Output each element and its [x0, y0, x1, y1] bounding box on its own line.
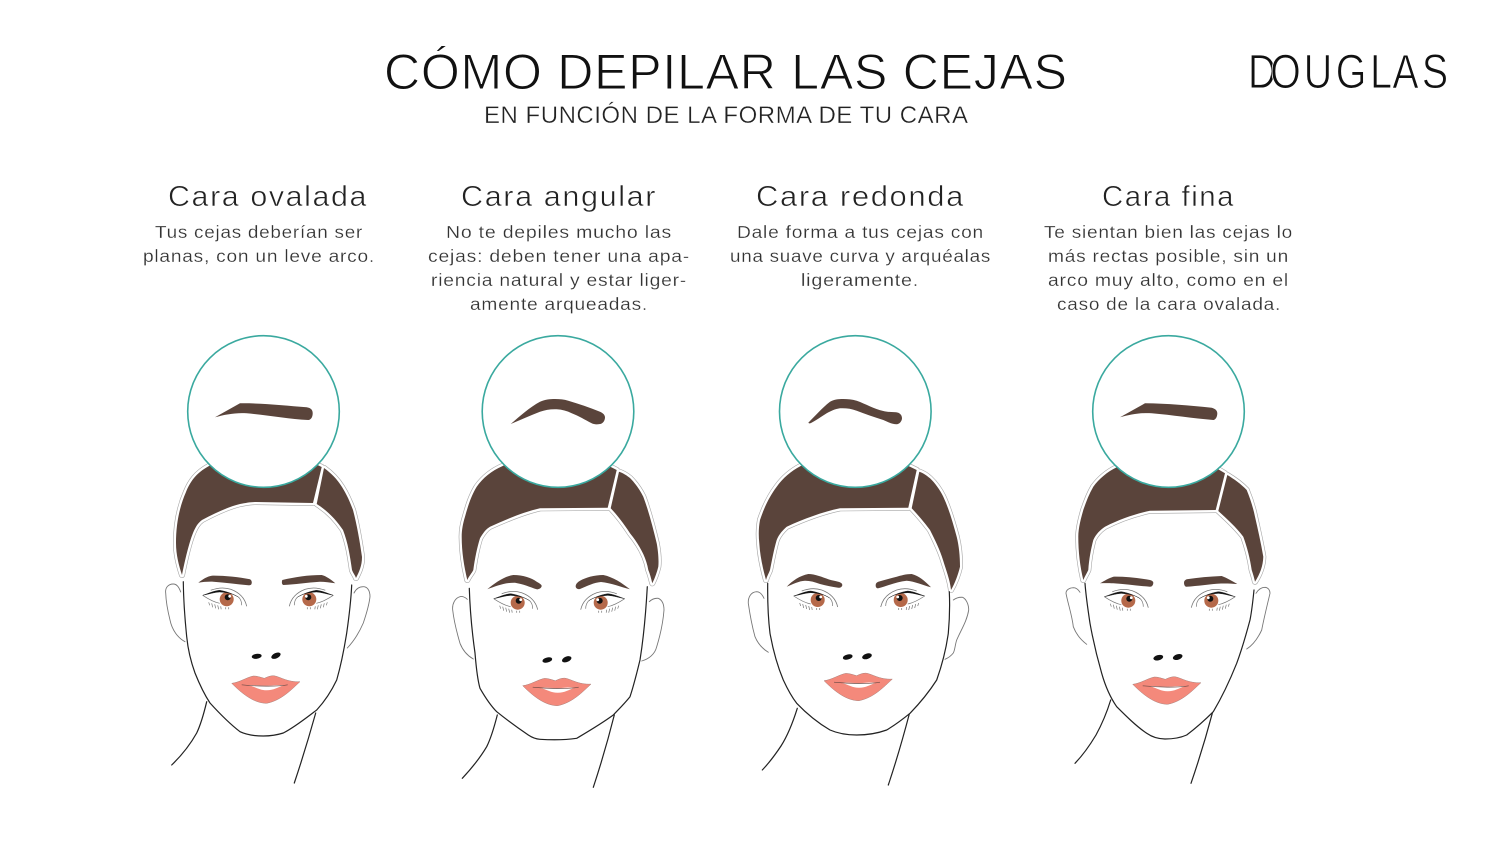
description: cara ovalada: planas, con un leve arco.: [143, 246, 375, 266]
description: cara fina: caso de la cara ovalada.: [1057, 294, 1281, 314]
panel: cara redonda: [730, 181, 991, 785]
eye left: [1104, 589, 1148, 611]
description: cara redonda: [730, 222, 991, 290]
heading: cara angular: Cara angular: [461, 181, 657, 213]
ears: [166, 584, 370, 648]
neck: [172, 702, 316, 783]
lips: [824, 673, 892, 701]
ears: [1066, 587, 1270, 649]
eye left: [203, 588, 247, 609]
description: cara fina: arco muy alto, como en el: [1048, 270, 1289, 290]
description: cara angular: [428, 222, 690, 314]
description: cara ovalada: [143, 222, 375, 266]
eyebrows: [787, 574, 931, 588]
eye right: [1191, 589, 1235, 611]
description: cara ovalada: Tus cejas deberían ser: [155, 222, 363, 242]
description: cara redonda: una suave curva y arquéalas: [730, 246, 991, 266]
title: CÓMO DEPILAR LAS CEJAS: [384, 44, 1067, 100]
hair: [759, 440, 960, 590]
description: cara redonda: Dale forma a tus cejas con: [737, 222, 984, 242]
nose: [1153, 653, 1183, 661]
neck: [1075, 700, 1212, 783]
nose: [251, 651, 282, 660]
face outline: [469, 587, 647, 740]
hair: [176, 440, 362, 578]
description: cara fina: [1044, 222, 1293, 314]
panel: cara angular: [428, 181, 690, 787]
circle with eyebrow shape: [1093, 336, 1244, 487]
eyebrows: [487, 575, 630, 589]
neck: [462, 715, 614, 787]
neck: [762, 708, 909, 785]
logo: Douglas: DOUGLAS: [1248, 45, 1448, 99]
description: cara fina: más rectas posible, sin un: [1048, 246, 1289, 266]
description: cara angular: cejas: deben tener una apa-: [428, 246, 690, 266]
description: cara redonda: ligeramente.: [801, 270, 919, 290]
lips: [523, 678, 591, 706]
face outline: [1085, 583, 1254, 739]
eye left: [494, 591, 538, 613]
panel: cara ovalada: [143, 181, 375, 783]
eyebrows: [1100, 576, 1237, 587]
eye left: [794, 589, 838, 610]
face outline: [768, 583, 950, 735]
nose: [842, 652, 873, 661]
eye right: [581, 591, 625, 613]
hair: [462, 440, 659, 583]
eye right: [289, 588, 333, 609]
heading: cara redonda: Cara redonda: [756, 181, 965, 213]
heading: cara fina: Cara fina: [1102, 181, 1235, 213]
panel: cara fina: [1044, 181, 1293, 783]
lips: [232, 676, 300, 703]
description: cara angular: riencia natural y estar liger-: [431, 270, 687, 290]
subtitle: EN FUNCIÓN DE LA FORMA DE TU CARA: [484, 102, 968, 129]
hair: [1078, 440, 1263, 582]
description: cara angular: No te depiles mucho las: [446, 222, 672, 242]
heading: cara ovalada: Cara ovalada: [168, 181, 368, 213]
ears: [453, 596, 664, 661]
nose: [542, 655, 572, 664]
circle with eyebrow shape: [188, 336, 339, 487]
eyebrows: [198, 575, 335, 585]
ears: [748, 592, 969, 659]
description: cara angular: amente arqueadas.: [470, 294, 648, 314]
eye right: [881, 589, 925, 610]
circle with eyebrow shape: [780, 336, 931, 487]
circle with eyebrow shape: [482, 336, 634, 487]
description: cara fina: Te sientan bien las cejas lo: [1044, 222, 1293, 242]
lips: [1133, 677, 1201, 704]
face outline: [183, 582, 352, 736]
